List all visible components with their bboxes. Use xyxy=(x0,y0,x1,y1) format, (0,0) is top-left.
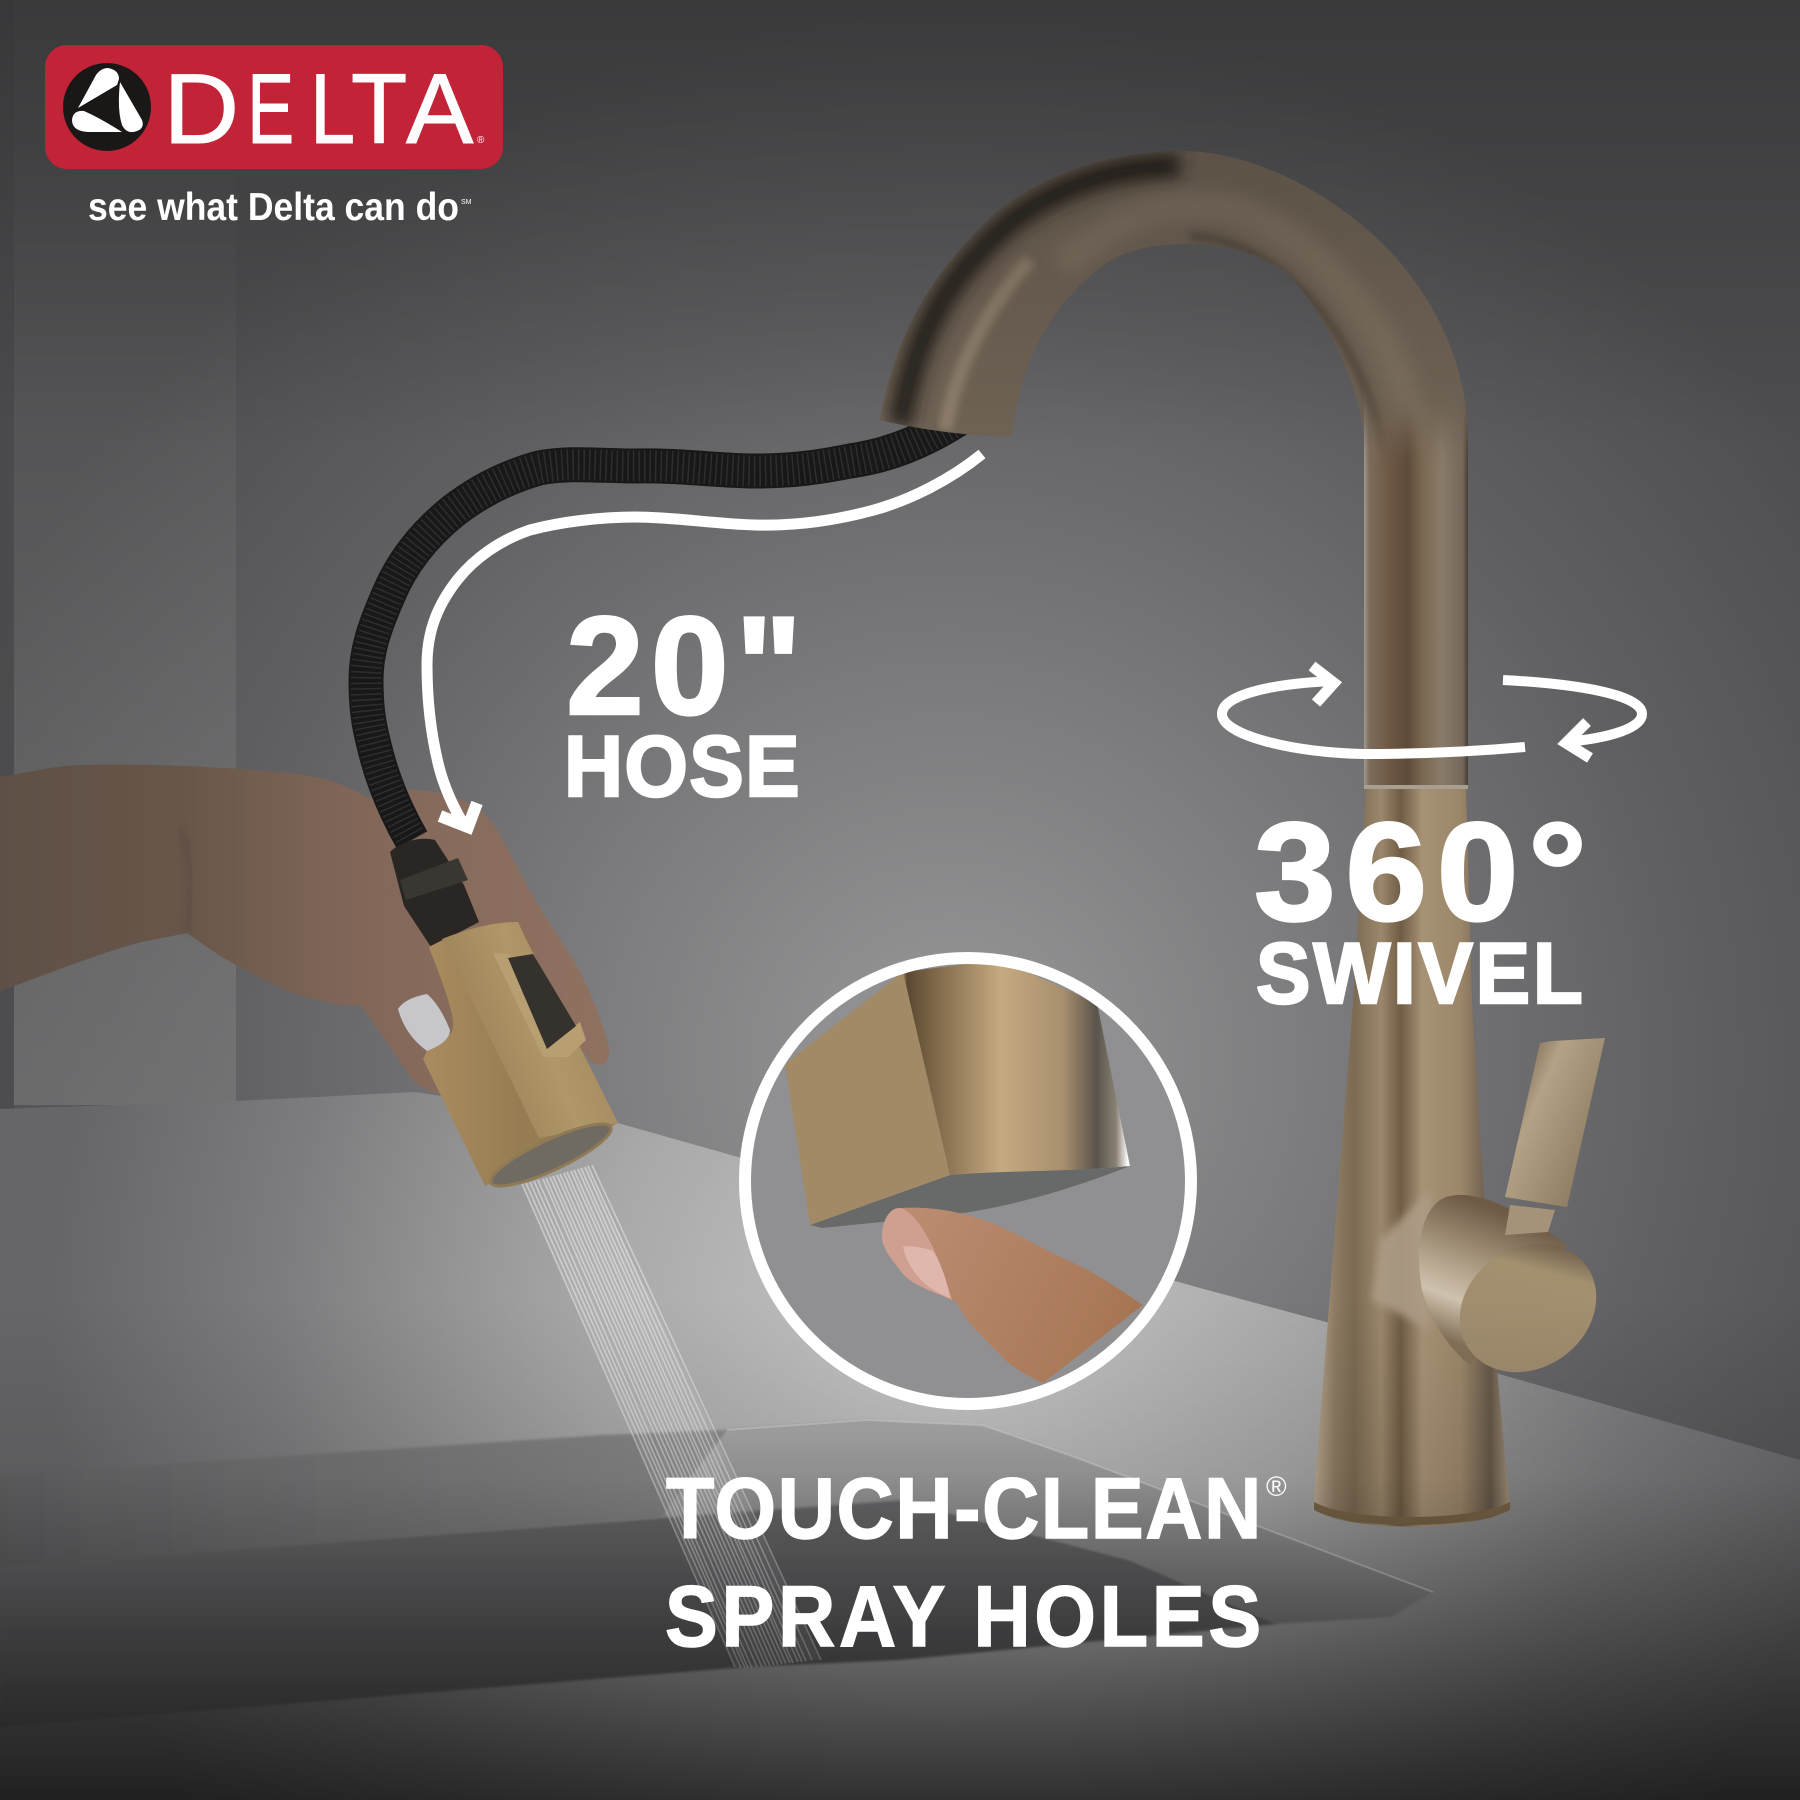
thumb with white nail xyxy=(348,934,453,1092)
swivel arrows xyxy=(1222,666,1642,758)
tagline: SM xyxy=(461,199,472,206)
label: 20 inch hose: HOSE xyxy=(564,718,800,814)
label: 360 degree swivel: SWIVEL xyxy=(1256,925,1583,1021)
magnified head right facet xyxy=(903,960,1130,1175)
tagline: see what Delta can do xyxy=(88,186,459,229)
countertop xyxy=(0,1092,1800,1800)
label: touch-clean spray holes: SPRAY HOLES xyxy=(665,1568,1261,1665)
label: touch-clean spray holes xyxy=(665,1460,1261,1665)
label: 20 inch hose xyxy=(564,587,802,814)
sink basin shadow xyxy=(0,1500,1277,1727)
pull-out braided hose xyxy=(366,418,960,840)
label: touch-clean spray holes: TOUCH-CLEAN xyxy=(666,1460,1261,1557)
spray button xyxy=(493,953,586,1057)
logo wordmark: E xyxy=(247,54,294,165)
faucet xyxy=(860,130,1621,1526)
counter ledge xyxy=(0,1420,900,1567)
close-up circle: touch-clean spray holes xyxy=(745,958,1191,1404)
magnified head left facet xyxy=(785,972,950,1225)
water spray xyxy=(522,1165,821,1668)
logo wordmark: D xyxy=(163,54,239,164)
faucet spout xyxy=(880,151,1468,470)
Delta logo: ® xyxy=(477,135,485,146)
Delta logo xyxy=(45,45,503,169)
faucet lower body xyxy=(1313,789,1510,1526)
fingertip xyxy=(882,1208,1143,1383)
label: 360 degree swivel: 360° xyxy=(1254,794,1587,950)
logo wordmark: L xyxy=(310,54,355,165)
handle disc xyxy=(1435,1218,1621,1398)
hose arrow xyxy=(427,454,982,827)
logo wordmark: A xyxy=(406,54,474,165)
sink basin wall xyxy=(660,1420,1433,1624)
handle cylinder xyxy=(1419,1195,1567,1365)
logo emblem xyxy=(63,63,151,151)
registered mark: ® xyxy=(1266,1471,1287,1502)
label: 360 degree swivel xyxy=(1254,794,1587,1021)
magnified spray face xyxy=(810,1166,1130,1228)
logo wordmark xyxy=(163,54,474,165)
label: 20 inch hose: 20" xyxy=(566,587,802,744)
spray head body xyxy=(423,922,618,1196)
spray head connector xyxy=(390,839,479,947)
handle blade xyxy=(1505,1038,1605,1207)
faucet vertical tube xyxy=(1364,470,1468,786)
logo wordmark: T xyxy=(351,54,407,165)
hand holding spray head xyxy=(0,765,609,1100)
